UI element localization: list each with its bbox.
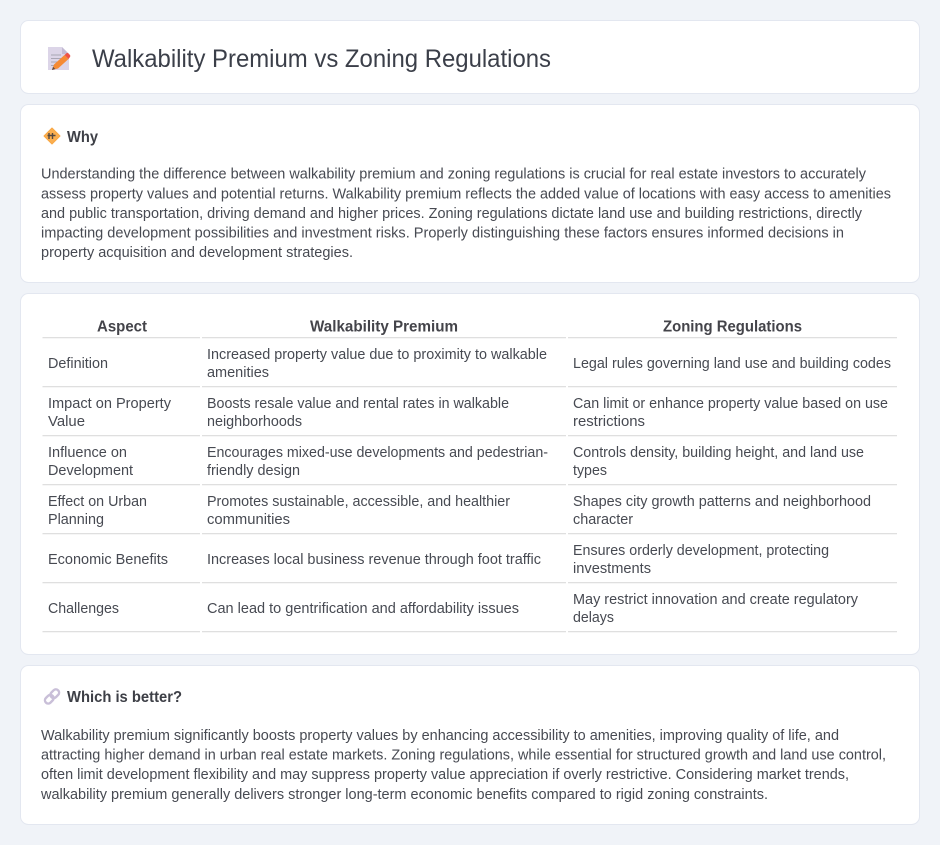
row: influence on development: Controls density, building height, and land use: [573, 445, 864, 461]
table header row: Walkability Premium: [310, 319, 458, 336]
row: effect on urban planning: [42, 494, 897, 534]
row: influence on development: Encourages mixed-use developments and pedestrian-: [207, 445, 548, 461]
title: Walkability Premium vs Zoning Regulations: [92, 45, 551, 73]
row: definition: [42, 347, 897, 387]
panel: which is better: [20, 666, 920, 824]
table header row: Aspect: [97, 319, 148, 336]
row: economic benefits: investments: [573, 561, 651, 577]
text block: why: property acquisition and development strategies.: [41, 245, 353, 261]
row: challenges: Can lead to gentrification and affordability issues: [207, 601, 519, 617]
row: effect on urban planning: character: [573, 512, 633, 528]
text block: why: assess property values and potential returns. Walkability premium reflects the added value of locations with easy access to amenities: [41, 186, 891, 202]
row: definition: Legal rules governing land use and building codes: [573, 356, 891, 372]
row: economic benefits: [42, 543, 897, 583]
text block: which is better: walkability premium generally delivers stronger long-term economic benefits compared to rigid zoning constraints.: [40, 787, 768, 803]
row: impact on property value: [42, 396, 897, 436]
row: effect on urban planning: communities: [207, 512, 290, 528]
text block: which is better: [40, 728, 886, 803]
row: challenges: May restrict innovation and create regulatory: [573, 592, 859, 608]
panel: comparison table: [20, 294, 920, 654]
table header row: Zoning Regulations: [663, 319, 802, 336]
row: impact on property value: restrictions: [573, 414, 645, 430]
row: challenges: delays: [573, 610, 614, 626]
icon: document with pencil: [48, 47, 70, 70]
row: influence on development: friendly design: [207, 463, 300, 479]
row: influence on development: Influence on: [48, 445, 127, 461]
icon: diamond warning sign: [44, 128, 60, 144]
text block: why: and public transportation, driving demand and higher prices. Zoning regulations dictate land use and building restrictions, directly: [41, 206, 863, 222]
text block: why: impacting development possibilities and investment risks. Properly distinguishing these factors ensures informed decisions in: [41, 226, 844, 242]
heading: which is better: Which is better?: [67, 689, 182, 706]
text block: why: [41, 167, 891, 261]
row: impact on property value: Boosts resale value and rental rates in walkable: [207, 396, 509, 412]
heading: why: Why: [67, 129, 98, 146]
text block: which is better: attracting higher demand in urban real estate markets. Zoning regulations, while essential for structured growth and land use control,: [41, 748, 886, 764]
row: challenges: [42, 592, 897, 632]
row: impact on property value: Value: [48, 414, 85, 430]
panel: why: [20, 104, 920, 282]
row: economic benefits: Increases local business revenue through foot traffic: [207, 552, 541, 568]
table header row: [42, 319, 897, 338]
panel: header: [20, 20, 920, 94]
row: effect on urban planning: Planning: [48, 512, 104, 528]
row: impact on property value: Impact on Property: [48, 396, 172, 412]
row: influence on development: [42, 445, 897, 485]
row: influence on development: Development: [48, 463, 133, 479]
icon: chain link: [44, 688, 60, 705]
text block: which is better: Walkability premium significantly boosts property values by enhancing accessibility to amenities, improving quality of life, and: [41, 728, 839, 744]
row: effect on urban planning: Effect on Urban: [48, 494, 147, 510]
row: effect on urban planning: Shapes city growth patterns and neighborhood: [573, 494, 871, 510]
row: influence on development: types: [573, 463, 607, 479]
row: definition: Increased property value due to proximity to walkable: [207, 347, 547, 363]
row: definition: Definition: [48, 356, 108, 372]
row: impact on property value: neighborhoods: [207, 414, 302, 430]
text block: which is better: often limit development flexibility and may suppress property value appreciation if overly restrictive. Considering market trends,: [41, 767, 849, 783]
text block: why: Understanding the difference between walkability premium and zoning regulations is crucial for real estate investors to accurately: [41, 167, 867, 183]
row: effect on urban planning: Promotes sustainable, accessible, and healthier: [207, 494, 510, 510]
row: economic benefits: Ensures orderly development, protecting: [573, 543, 829, 559]
row: challenges: Challenges: [48, 601, 119, 617]
row: impact on property value: Can limit or enhance property value based on use: [573, 396, 888, 412]
row: definition: amenities: [207, 365, 269, 381]
row: economic benefits: Economic Benefits: [48, 552, 168, 568]
